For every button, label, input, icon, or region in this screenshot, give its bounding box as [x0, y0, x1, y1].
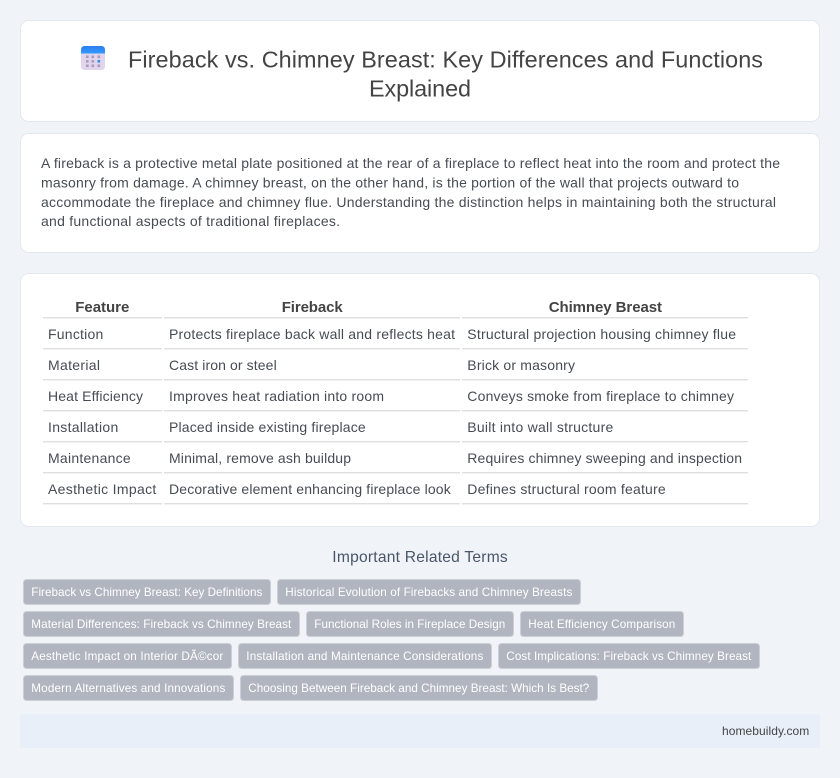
text block: introduction paragraph: masonry from damage. A chimney breast, on the other hand, is the portion of the wall that projects outward to	[41, 174, 739, 190]
title: Explained	[369, 76, 471, 102]
row: function	[48, 326, 736, 342]
tag	[238, 644, 492, 668]
tag	[498, 644, 760, 668]
table header row: Feature	[75, 299, 129, 316]
footer credit: homebuildy.com	[722, 724, 809, 738]
row: aesthetic impact: Defines structural room feature	[467, 481, 666, 497]
icon: calendar	[81, 46, 105, 70]
text block: introduction paragraph	[41, 155, 780, 229]
tag: Functional Roles in Fireplace Design	[314, 618, 505, 631]
row: heat efficiency: Heat Efficiency	[48, 388, 143, 404]
row: heat efficiency: Conveys smoke from fireplace to chimney	[467, 388, 734, 404]
row: material: Material	[48, 357, 100, 373]
table header row	[75, 299, 662, 316]
tag	[240, 676, 598, 700]
tag: Material Differences: Fireback vs Chimney Breast	[31, 618, 292, 631]
panel: introduction	[20, 134, 820, 252]
row: aesthetic impact	[48, 481, 666, 497]
row: installation: Placed inside existing fireplace	[169, 419, 366, 435]
row: maintenance	[48, 450, 742, 466]
tag: Historical Evolution of Firebacks and Chimney Breasts	[285, 586, 572, 599]
row: material: Brick or masonry	[467, 357, 575, 373]
text block: introduction paragraph: and functional aspects of traditional fireplaces.	[41, 213, 340, 229]
row: function: Protects fireplace back wall and reflects heat	[169, 326, 455, 342]
row: installation: Built into wall structure	[467, 419, 614, 435]
text block: introduction paragraph: accommodate the fireplace and chimney flue. Understanding the distinction helps in maintaining both the structural	[41, 194, 776, 210]
row: heat efficiency	[48, 388, 734, 404]
row: maintenance: Minimal, remove ash buildup	[169, 450, 351, 466]
tag: Choosing Between Fireback and Chimney Breast: Which Is Best?	[248, 682, 590, 695]
tag	[306, 612, 514, 636]
table header row: Chimney Breast	[549, 299, 662, 316]
panel: comparison table	[20, 274, 820, 526]
row: function: Function	[48, 326, 103, 342]
row: aesthetic impact: Decorative element enhancing fireplace look	[169, 481, 452, 497]
row: maintenance: Maintenance	[48, 450, 131, 466]
row: installation	[48, 419, 614, 435]
text block: introduction paragraph: A fireback is a protective metal plate positioned at the rear of a fireplace to reflect heat into the room and protect the	[41, 155, 780, 171]
tag: Installation and Maintenance Considerations	[246, 650, 483, 663]
panel: header	[20, 20, 820, 122]
row: heat efficiency: Improves heat radiation into room	[169, 388, 384, 404]
row: function: Structural projection housing chimney flue	[467, 326, 736, 342]
tag: Fireback vs Chimney Breast: Key Definitions	[31, 586, 262, 599]
row: maintenance: Requires chimney sweeping and inspection	[467, 450, 742, 466]
tag	[520, 612, 684, 636]
tag	[278, 580, 580, 604]
tag: Cost Implications: Fireback vs Chimney Breast	[506, 650, 752, 663]
panel: related term tags	[24, 580, 760, 700]
tag	[24, 676, 234, 700]
tag	[24, 580, 270, 604]
tag	[24, 644, 232, 668]
row: material: Cast iron or steel	[169, 357, 277, 373]
heading: important related terms: Important Related Terms	[332, 549, 508, 566]
row: aesthetic impact: Aesthetic Impact	[48, 481, 156, 497]
tag: Heat Efficiency Comparison	[528, 618, 675, 631]
tag: Modern Alternatives and Innovations	[31, 682, 225, 695]
row: material	[48, 357, 575, 373]
tag: Aesthetic Impact on Interior DÃ©cor	[31, 650, 223, 663]
tag	[24, 612, 300, 636]
table header row: Fireback	[282, 299, 343, 316]
row: installation: Installation	[48, 419, 118, 435]
title: Fireback vs. Chimney Breast: Key Differences and Functions	[128, 46, 763, 72]
title	[128, 46, 763, 102]
footer	[20, 714, 820, 748]
